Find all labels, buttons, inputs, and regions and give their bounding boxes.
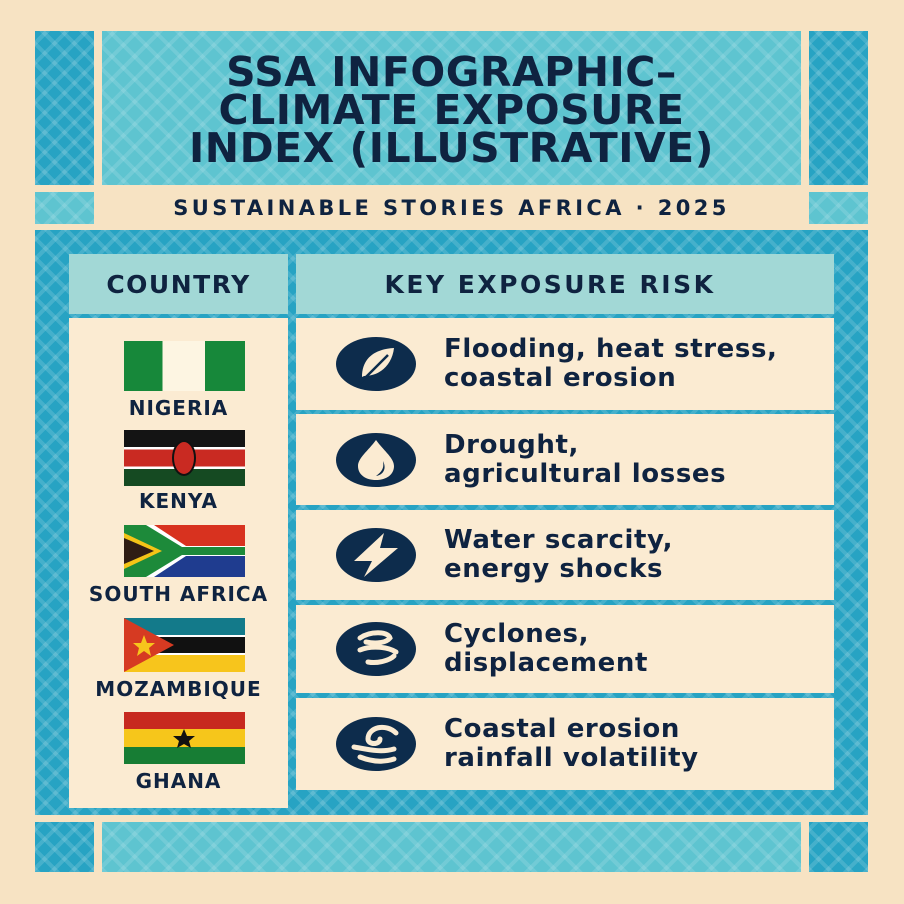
title panel: SSA INFOGRAPHIC– [226, 48, 677, 96]
row 2: agricultural losses [444, 458, 726, 488]
right header pattern [809, 31, 868, 185]
icon: leaf [336, 337, 416, 391]
row 5: Coastal erosion [444, 714, 680, 744]
row 4: Cyclones, [444, 619, 589, 649]
icon: lightning [336, 528, 416, 582]
flag: Nigeria [124, 341, 245, 391]
title panel: CLIMATE EXPOSURE [218, 86, 684, 134]
row 4 [296, 605, 834, 693]
row 1: coastal erosion [444, 363, 676, 393]
main table frame [35, 230, 868, 815]
flag: Ghana [124, 712, 245, 764]
row 3 [296, 510, 834, 600]
flag: Kenya [124, 430, 245, 486]
country column: GHANA [136, 769, 221, 793]
row 4: displacement [444, 648, 648, 678]
icon: cyclone [336, 622, 416, 676]
row 3: energy shocks [444, 554, 663, 584]
title panel [102, 31, 801, 185]
country column: KENYA [139, 489, 218, 513]
country column: MOZAMBIQUE [95, 677, 262, 701]
country column: SOUTH AFRICA [89, 582, 268, 606]
country column [69, 318, 288, 808]
header: country: COUNTRY [106, 270, 251, 298]
subtitle: SUSTAINABLE STORIES AFRICA · 2025 [173, 196, 730, 220]
row 1 [296, 318, 834, 410]
header: key exposure risk: KEY EXPOSURE RISK [385, 270, 715, 298]
flag: Mozambique [124, 618, 245, 672]
title panel: INDEX (ILLUSTRATIVE) [189, 124, 714, 172]
left header pattern [35, 31, 94, 185]
header: key exposure risk [296, 254, 834, 314]
row 1: Flooding, heat stress, [444, 334, 778, 364]
icon: water drop [336, 433, 416, 487]
row 5 [296, 698, 834, 790]
row 2 [296, 414, 834, 505]
header: country [69, 254, 288, 314]
row 5: rainfall volatility [444, 743, 699, 773]
icon: wave [336, 717, 416, 771]
country column: NIGERIA [129, 396, 228, 420]
flag: South Africa [124, 525, 245, 577]
row 3: Water scarcity, [444, 525, 673, 555]
row 2: Drought, [444, 430, 579, 460]
bottom band [35, 822, 94, 872]
